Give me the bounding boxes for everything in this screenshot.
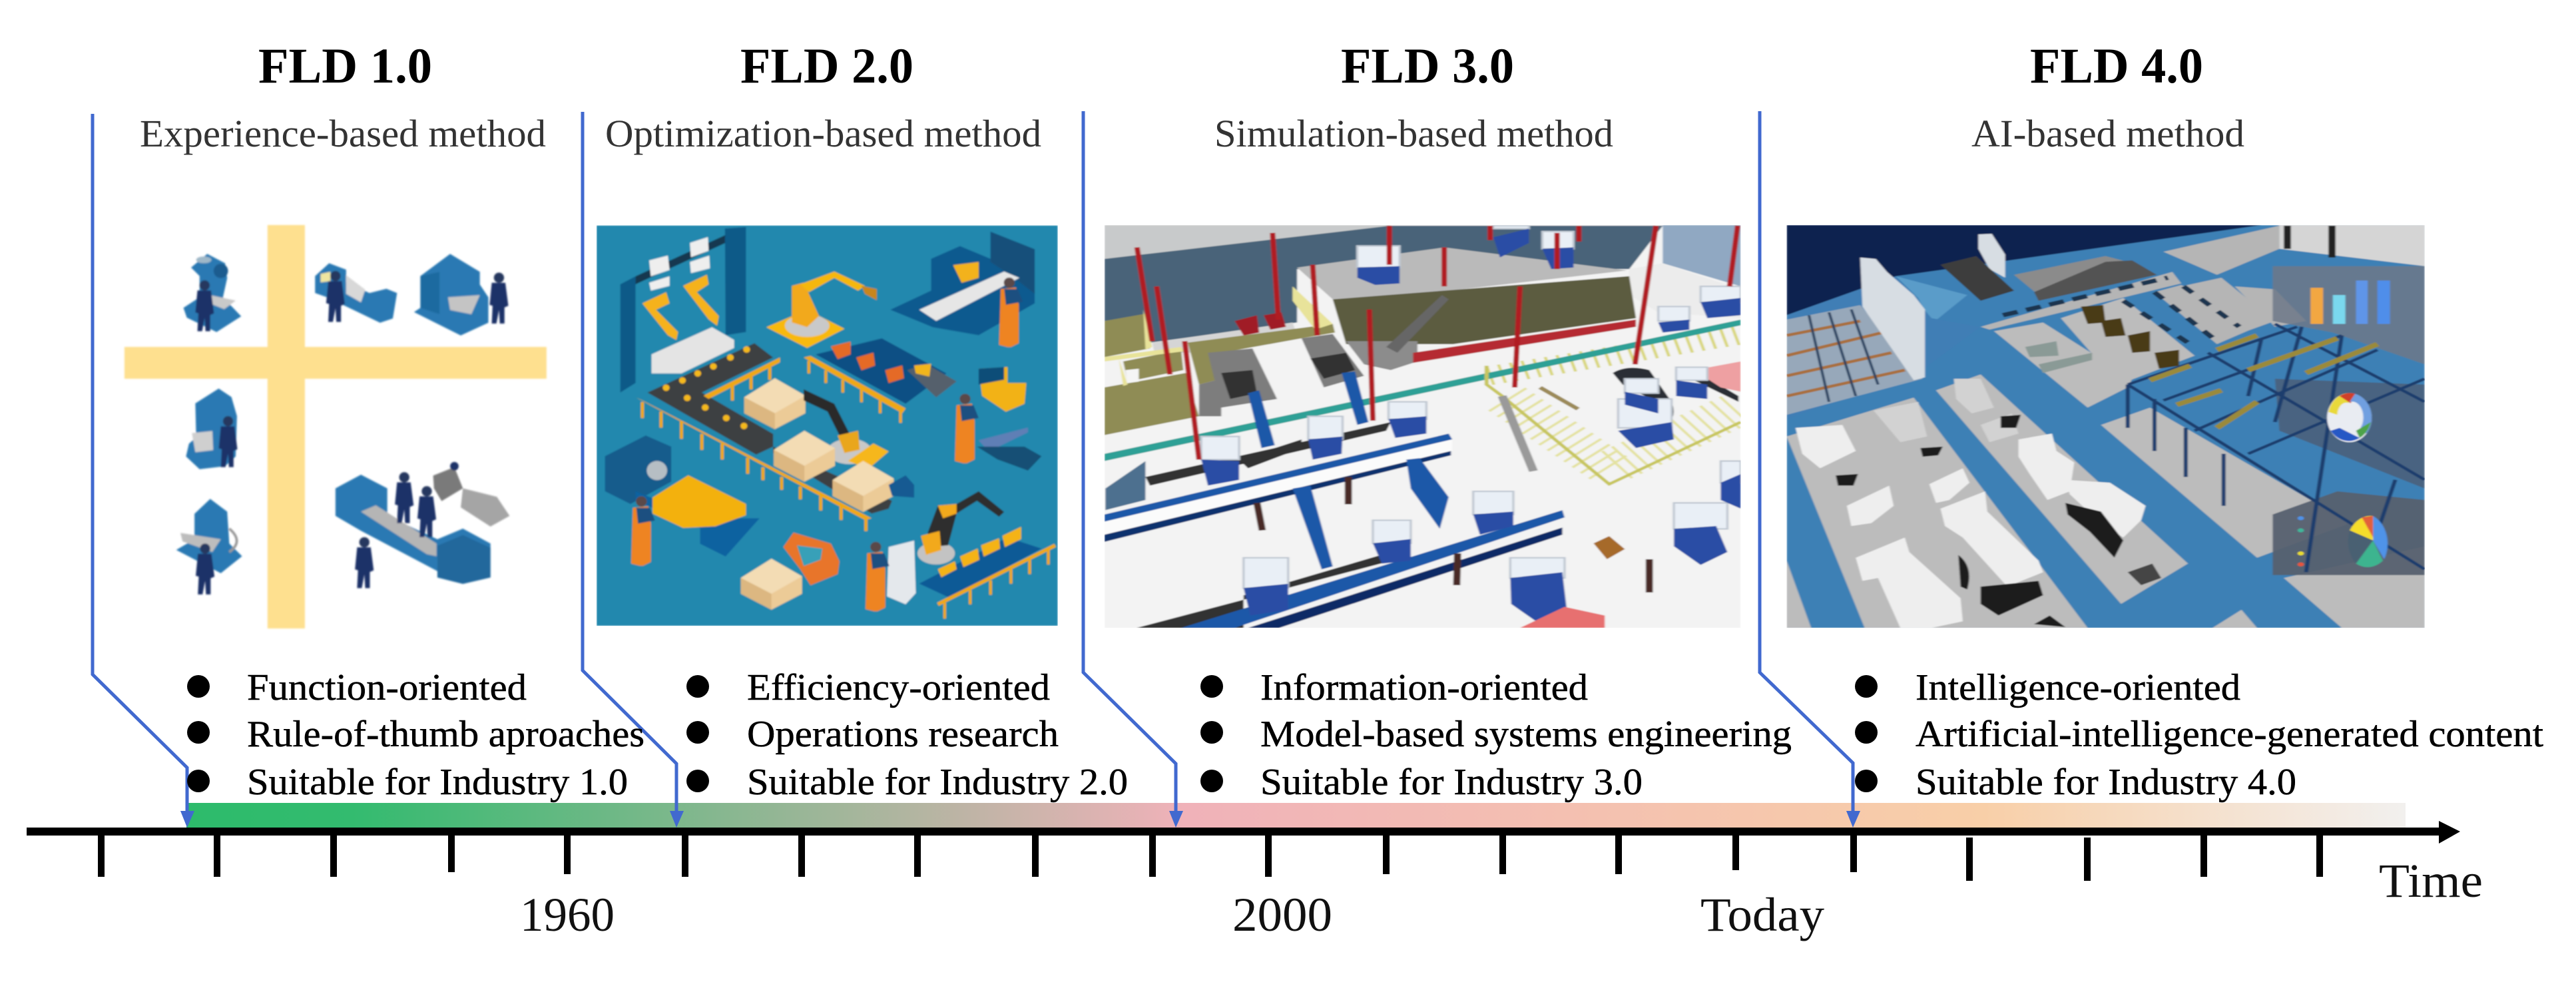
bullet list: FLD 4.0: Intelligence-oriented bbox=[1916, 667, 2240, 708]
bullet list: FLD 4.0 bbox=[1855, 667, 2543, 803]
bullet list: FLD 4.0: Artificial-intelligence-generated content bbox=[1916, 714, 2543, 755]
gradient timeline band bbox=[186, 803, 2406, 828]
axis label: Time: Time bbox=[2379, 854, 2483, 907]
heading: FLD 2.0: FLD 2.0 bbox=[740, 39, 913, 94]
illustration: AI smart factory digital twin with dashboards bbox=[1786, 225, 2425, 628]
bullet list: FLD 2.0: Efficiency-oriented bbox=[747, 667, 1050, 708]
axis label: Today: Today bbox=[1700, 888, 1824, 941]
bullet list: FLD 4.0: Suitable for Industry 4.0 bbox=[1916, 762, 2296, 803]
heading: FLD 1.0: FLD 1.0 bbox=[258, 39, 432, 94]
bullet list: FLD 1.0: Function-oriented bbox=[247, 667, 527, 708]
arrow: FLD 4.0 start connector bbox=[1760, 111, 1860, 828]
timeline axis with arrowhead and ticks bbox=[27, 821, 2460, 881]
panel: FLD 3.0 bbox=[1105, 39, 1741, 628]
bullet list: FLD 3.0: Information-oriented bbox=[1260, 667, 1588, 708]
subheading: simulation-based method: Simulation-based method bbox=[1214, 112, 1613, 155]
bullet list: FLD 1.0: Rule-of-thumb aproaches bbox=[247, 714, 644, 755]
panel: FLD 4.0 bbox=[1786, 39, 2425, 628]
bullet list: FLD 3.0 bbox=[1200, 667, 1792, 803]
panel: FLD 2.0 bbox=[597, 39, 1058, 626]
illustration: 3D factory simulation model bbox=[1105, 225, 1741, 628]
bullet list: FLD 1.0: Suitable for Industry 1.0 bbox=[247, 762, 628, 803]
axis label: 2000: 2000 bbox=[1232, 888, 1332, 941]
axis label: 1960: 1960 bbox=[520, 888, 615, 941]
bullet list: FLD 2.0: Suitable for Industry 2.0 bbox=[747, 762, 1128, 803]
subheading: optimization-based method: Optimization-based method bbox=[605, 112, 1041, 155]
illustration: isometric automated factory on teal background bbox=[597, 225, 1058, 626]
arrow: FLD 3.0 start connector bbox=[1083, 111, 1183, 828]
panel: FLD 1.0 bbox=[125, 39, 547, 628]
bullet list: FLD 3.0: Suitable for Industry 3.0 bbox=[1260, 762, 1643, 803]
arrow: FLD 2.0 start connector bbox=[583, 112, 684, 828]
bullet list: FLD 2.0: Operations research bbox=[747, 714, 1059, 755]
illustration: scattered machines divided by yellow cross bbox=[125, 225, 547, 628]
heading: FLD 3.0: FLD 3.0 bbox=[1341, 39, 1514, 94]
bullet list: FLD 1.0 bbox=[187, 667, 644, 803]
subheading: experience-based method: Experience-based method bbox=[140, 112, 546, 155]
heading: FLD 4.0: FLD 4.0 bbox=[2030, 39, 2203, 94]
subheading: AI-based method: AI-based method bbox=[1971, 112, 2244, 155]
bullet list: FLD 2.0 bbox=[686, 667, 1128, 803]
arrow: FLD 1.0 start connector bbox=[93, 114, 194, 828]
bullet list: FLD 3.0: Model-based systems engineering bbox=[1260, 714, 1792, 755]
